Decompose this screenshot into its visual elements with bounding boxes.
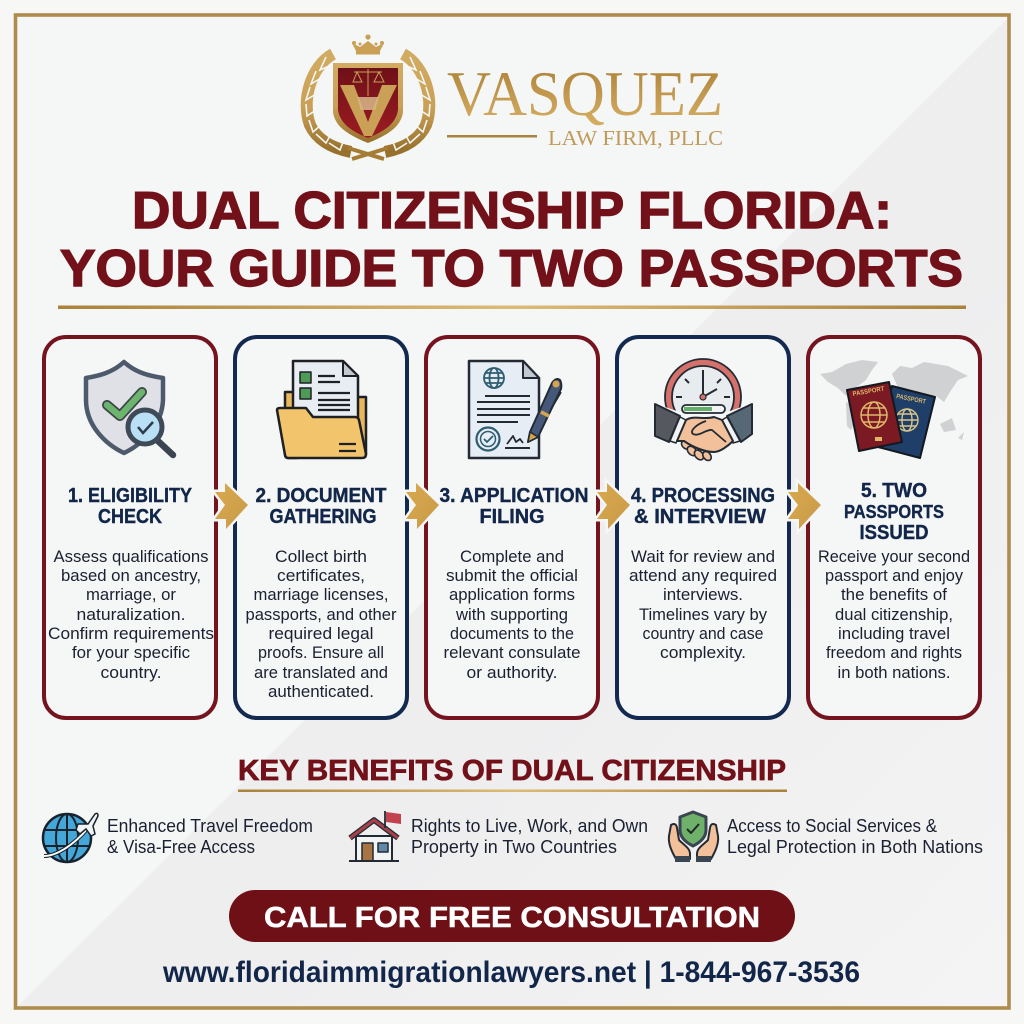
description: certificates, (277, 567, 365, 585)
logo: Vasquez Law Firm (306, 34, 723, 159)
heading (68, 485, 193, 528)
wordmark: VASQUEZ (447, 58, 723, 129)
text: Property in Two Countries (411, 837, 617, 857)
icon: hands and shield (669, 812, 718, 862)
heading: 3. APPLICATION (440, 485, 588, 507)
text: Enhanced Travel Freedom (107, 816, 313, 836)
description: Collect birth (275, 548, 367, 566)
description (48, 548, 214, 682)
icon: globe and plane (43, 813, 98, 862)
icon: laurel wreath (306, 54, 430, 159)
description: Wait for review and (631, 548, 775, 566)
panel: step 4 processing and interview (617, 337, 789, 718)
description: the benefits of (841, 586, 947, 604)
heading: CHECK (98, 506, 162, 528)
description (818, 548, 970, 682)
description: application forms (449, 586, 575, 604)
description: proofs. Ensure all (258, 644, 384, 662)
description: attend any required (629, 567, 777, 585)
title: YOUR GUIDE TO TWO PASSPORTS (60, 240, 963, 298)
description: passports, and other (246, 606, 397, 624)
description: for your specific (72, 644, 190, 662)
text (411, 816, 648, 857)
panel: step 5 two passports issued (808, 337, 980, 718)
description: based on ancestry, (61, 567, 201, 585)
title (60, 182, 963, 298)
icon: shield (333, 63, 403, 143)
panel: step 2 document gathering (235, 337, 407, 718)
description: including travel (838, 625, 950, 643)
description (444, 548, 580, 682)
panel: step 1 eligibility check (44, 337, 216, 718)
benefit: social services and legal protection (669, 812, 983, 862)
icon: crown (352, 34, 384, 54)
description: submit the official (446, 567, 578, 585)
heading: key benefits: KEY BENEFITS OF DUAL CITIZENSHIP (238, 755, 786, 787)
text: Access to Social Services & (727, 816, 937, 836)
text (727, 816, 983, 857)
description: dual citizenship, (835, 606, 953, 624)
heading: 1. ELIGIBILITY (68, 485, 193, 507)
text: & Visa-Free Access (107, 837, 255, 857)
description: are translated and (254, 664, 388, 682)
description: authenticated. (268, 683, 374, 701)
heading: ISSUED (860, 522, 928, 544)
icon: world map with passports: PASSPORT (896, 393, 926, 406)
icon: shield with magnifier (86, 362, 173, 455)
text (107, 816, 313, 857)
heading: FILING (480, 506, 544, 528)
title: DUAL CITIZENSHIP FLORIDA: (132, 182, 892, 240)
heading: GATHERING (270, 506, 376, 528)
description: complexity. (660, 644, 746, 662)
heading: 2. DOCUMENT (256, 485, 386, 507)
heading: 5. TWO (861, 480, 927, 502)
arrow: step 4 to 5 (788, 483, 821, 529)
icon: clock and handshake (650, 359, 756, 462)
benefit: travel freedom (43, 813, 313, 862)
description: naturalization. (76, 606, 186, 624)
heading: PASSPORTS (844, 501, 944, 522)
heading (440, 485, 588, 528)
panel: step 3 application filing (426, 337, 598, 718)
description: Receive your second (818, 548, 970, 566)
description: country and case (642, 625, 764, 643)
icon: folder with checklist (277, 361, 366, 458)
icon: world map with passports: PASSPORT (852, 386, 885, 398)
description: required legal (268, 625, 374, 643)
icon: world map with passports (820, 360, 968, 458)
description: Timelines vary by (639, 606, 768, 624)
contact line: www.floridaimmigrationlawyers.net | 1-844-967-3536 (162, 956, 860, 989)
heading: & INTERVIEW (634, 506, 766, 528)
arrow: step 1 to 2 (215, 483, 248, 529)
description: interviews. (663, 586, 743, 604)
heading (631, 485, 775, 528)
heading (844, 480, 944, 544)
description: Complete and (460, 548, 564, 566)
description: documents to the (450, 625, 574, 643)
call to action button (229, 890, 795, 942)
description: relevant consulate (444, 644, 580, 662)
wordmark: LAW FIRM, PLLC (548, 126, 723, 150)
description: in both nations. (838, 664, 950, 682)
description (629, 548, 777, 662)
description: Confirm requirements (48, 625, 214, 643)
description: or authority. (466, 664, 558, 682)
text: Legal Protection in Both Nations (727, 837, 983, 857)
description: freedom and rights (826, 644, 962, 662)
description: with supporting (455, 606, 568, 624)
arrow: step 2 to 3 (406, 483, 439, 529)
description (246, 548, 397, 701)
text: Rights to Live, Work, and Own (411, 816, 648, 836)
call to action button: CALL FOR FREE CONSULTATION (264, 902, 760, 934)
description: marriage, or (86, 586, 177, 604)
description: marriage licenses, (254, 586, 388, 604)
icon: house with flag (349, 811, 401, 862)
heading: 4. PROCESSING (631, 485, 775, 507)
description: Assess qualifications (54, 548, 208, 566)
description: passport and enjoy (825, 567, 964, 585)
heading (256, 485, 386, 528)
description: country. (100, 664, 162, 682)
arrow: step 3 to 4 (597, 483, 630, 529)
benefit: live, work, own property (349, 811, 648, 862)
icon: signed document and pen (469, 361, 561, 458)
